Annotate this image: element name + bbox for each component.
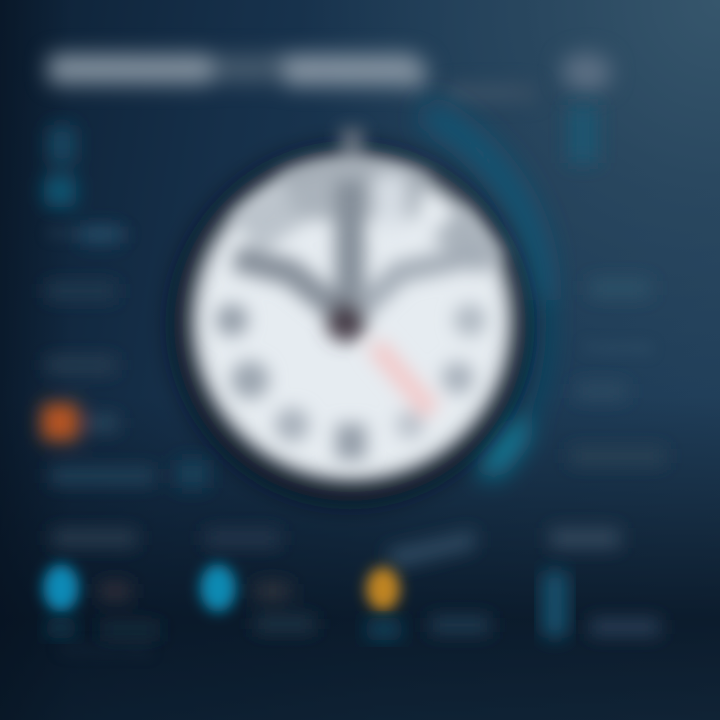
title: Benefits of Time Tracking <box>46 49 430 91</box>
title <box>34 39 438 101</box>
icon: blue dot 1 <box>43 564 79 612</box>
bottom row text: Focus and clarity <box>60 642 151 656</box>
bottom row labels <box>52 528 660 636</box>
hub <box>326 302 366 342</box>
left column markers <box>41 125 208 488</box>
left column text: Accountability <box>48 225 128 240</box>
subtitle <box>446 84 536 102</box>
numerals <box>216 304 248 336</box>
icon: teal under blue <box>46 618 76 638</box>
icon: teal bar <box>542 570 568 638</box>
hands <box>335 180 365 320</box>
right column markers <box>568 105 665 464</box>
header badge: Tip <box>562 55 606 88</box>
icon: orange dot <box>366 567 400 611</box>
icon: blue dot 2 <box>200 564 236 612</box>
bottom row icons <box>43 564 568 640</box>
clock shadow <box>174 149 526 501</box>
right column text: Productivity <box>585 340 652 355</box>
clock numerals and hands <box>216 158 505 460</box>
progress arc <box>425 112 542 472</box>
subtitle: time saved <box>446 84 509 99</box>
icon: teal under orange <box>366 618 402 640</box>
clock face <box>187 128 517 485</box>
